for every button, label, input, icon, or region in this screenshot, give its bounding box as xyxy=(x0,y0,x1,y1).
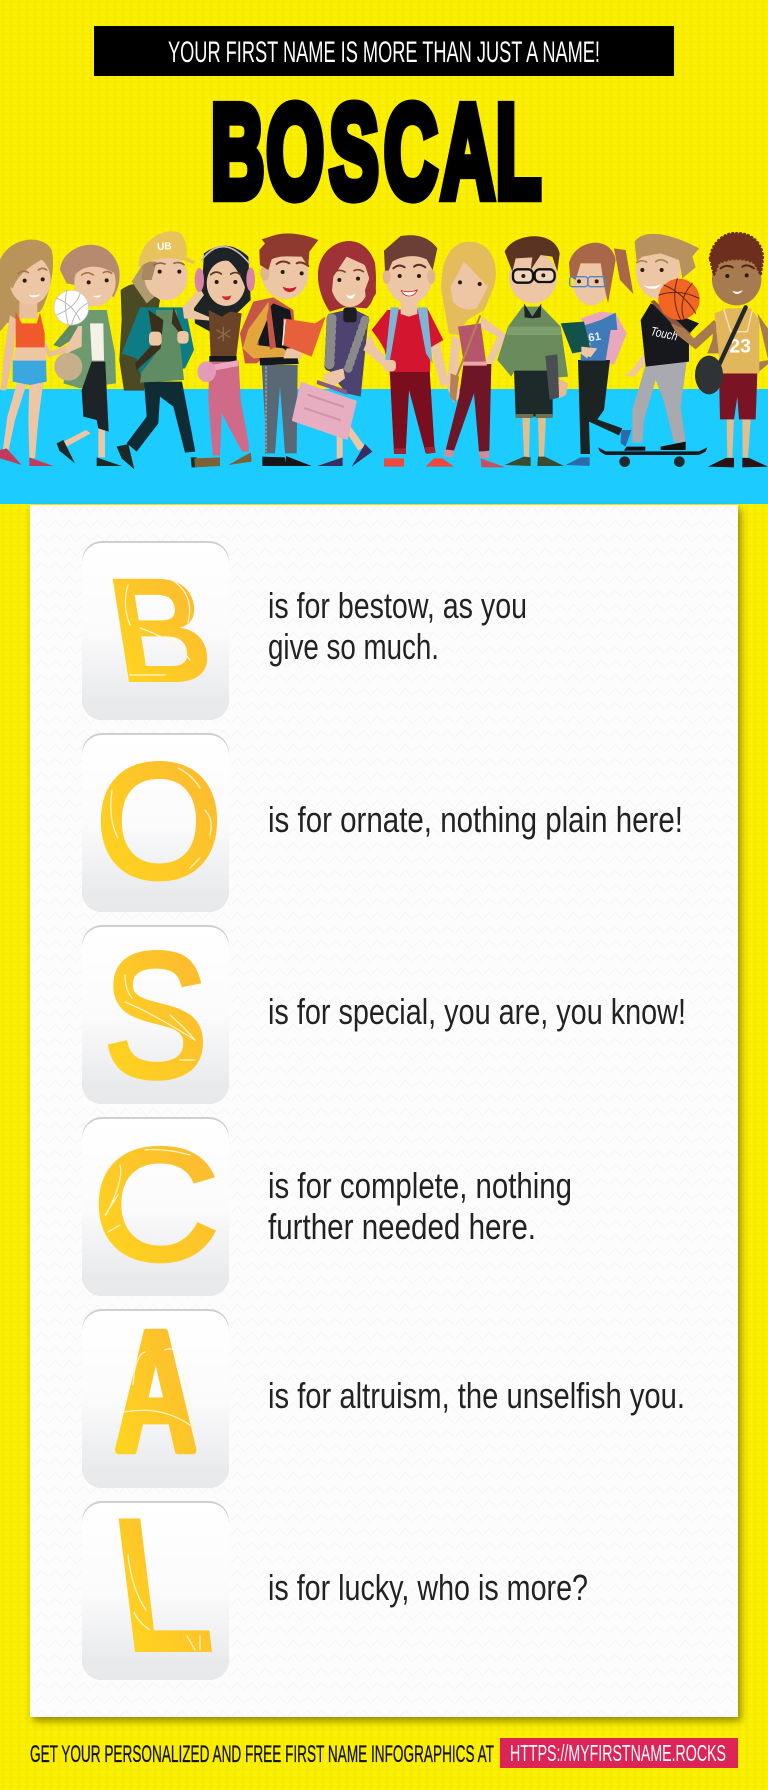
person 9: boy with glasses and green sweater xyxy=(497,236,568,466)
letter tile: C: C xyxy=(93,1117,219,1293)
person 11: skater boy with basketball: Touch xyxy=(649,325,679,344)
headline banner xyxy=(94,26,674,76)
illustration: group of twelve young people, left half xyxy=(0,231,376,469)
title: BOSCAL: BOSCAL xyxy=(211,77,541,225)
person 7: boy in red t-shirt with blue backpack straps xyxy=(363,235,454,467)
text: O line: is for ornate, nothing plain here! xyxy=(268,799,683,840)
text: B line: give so much. xyxy=(268,626,439,667)
person 12: boy with curly hair, yellow tank top number 23: 23 xyxy=(729,337,751,358)
letter tile: A: A xyxy=(115,1296,197,1487)
text: A line: is for altruism, the unselfish you. xyxy=(268,1375,685,1416)
person 3: boy with cap and big backpack xyxy=(117,231,197,469)
white content panel xyxy=(30,505,738,1717)
text: C line xyxy=(268,1165,572,1247)
text: L line: is for lucky, who is more? xyxy=(268,1567,588,1608)
person 10: girl with blue glasses, tablet and pink backpack xyxy=(561,243,633,466)
person 10: girl with blue glasses, tablet and pink backpack: 61 xyxy=(587,331,602,345)
person 1: girl in orange top and blue shorts xyxy=(0,240,80,466)
person 5: boy reading an orange book xyxy=(240,233,326,466)
letter tile: L: L xyxy=(103,1476,222,1693)
letter tile: B: B xyxy=(99,547,223,714)
text: B line xyxy=(268,585,527,667)
text: C line: further needed here. xyxy=(268,1206,536,1247)
person 2: girl in green jacket with volleyball xyxy=(53,245,122,466)
letter tile: O: O xyxy=(96,731,222,912)
letter tile: A xyxy=(82,1296,229,1488)
person 8: blonde girl with burgundy jeans xyxy=(441,242,507,467)
text: C line: is for complete, nothing xyxy=(268,1165,572,1206)
person 3: boy with cap and big backpack: UB xyxy=(157,241,172,253)
text: B line: is for bestow, as you xyxy=(268,585,527,626)
person 6: girl with red hair and pink bag xyxy=(293,241,376,467)
person 4: girl with black hair, headphones and pink trousers xyxy=(183,246,255,467)
letter tile: S: S xyxy=(104,918,207,1114)
basketball xyxy=(658,279,700,320)
person 12: boy with curly hair, yellow tank top number 23 xyxy=(658,233,768,467)
person 11: skater boy with basketball xyxy=(598,234,707,467)
cyan floor band xyxy=(0,389,768,504)
illustration: group of twelve young people, right half xyxy=(363,233,768,467)
